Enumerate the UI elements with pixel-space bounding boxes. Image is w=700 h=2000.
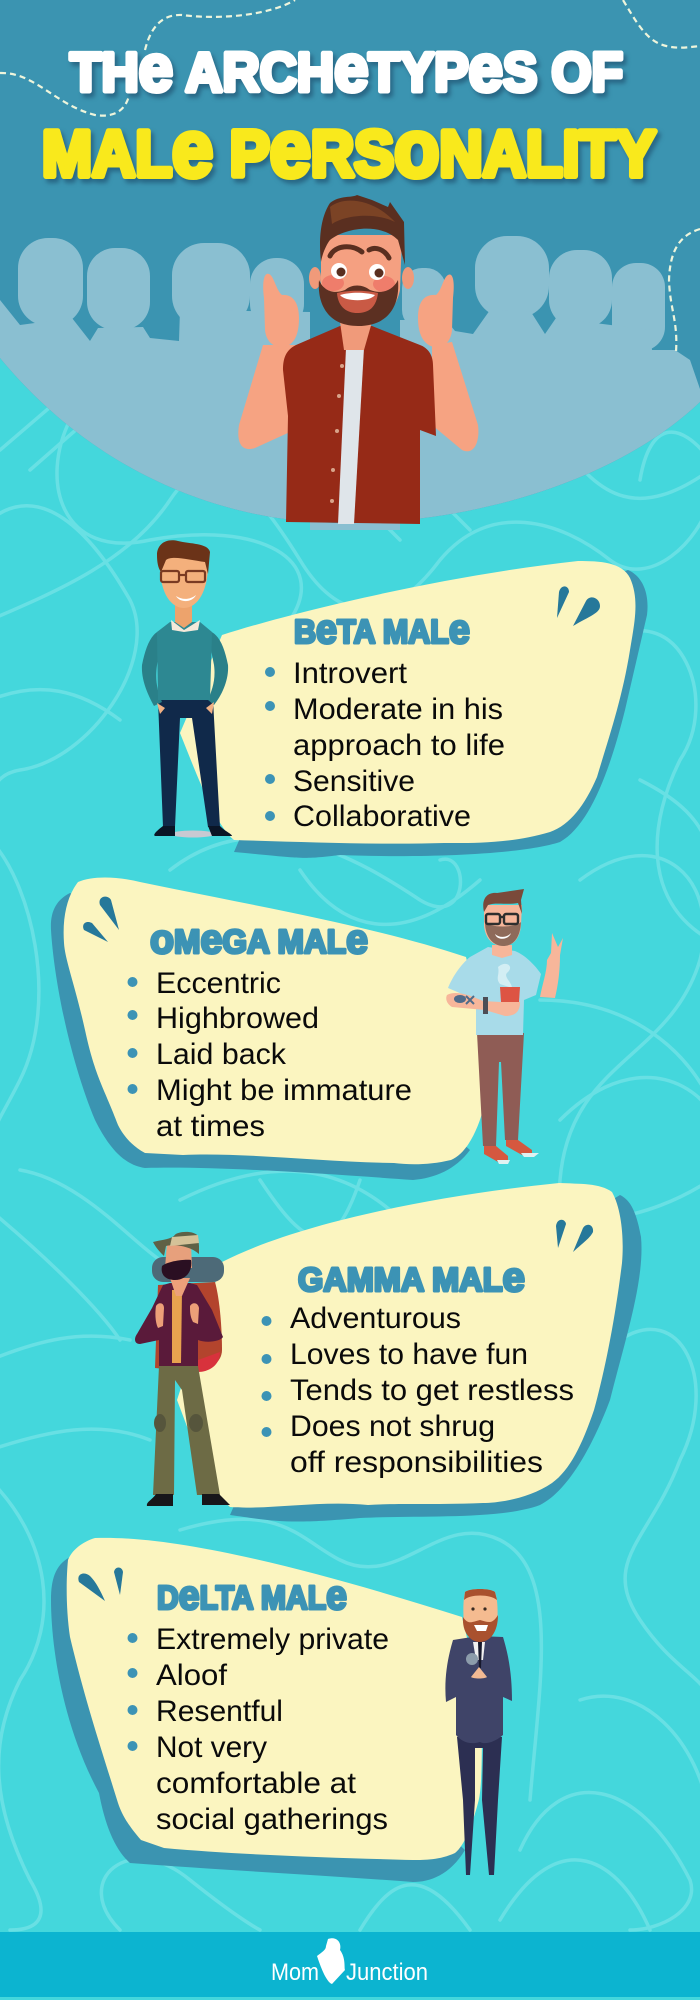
card <box>64 878 490 1164</box>
list: Tends to get restless <box>290 1374 574 1407</box>
logo: MomJunction <box>271 1938 428 1986</box>
list: Extremely private <box>156 1623 389 1656</box>
list: Laid back <box>156 1038 287 1071</box>
title line 1: THe ARCHeTYPeS OF <box>70 31 623 105</box>
crowd silhouette <box>0 236 700 530</box>
list: Not very <box>156 1731 267 1764</box>
heading: BeTA MALe <box>294 606 470 652</box>
list <box>262 1302 574 1479</box>
illustration: man in teal sweater <box>142 540 232 838</box>
list <box>128 1623 389 1836</box>
panel shadow <box>51 893 470 1180</box>
header banner with curved bottom <box>0 0 700 523</box>
decoration drops <box>557 586 600 626</box>
list <box>128 967 412 1143</box>
card <box>67 1538 482 1860</box>
panel: beta male <box>142 540 648 858</box>
panel shadow <box>230 1195 642 1522</box>
list: Moderate in his <box>293 693 503 726</box>
list: Sensitive <box>293 765 415 798</box>
heading: GAMMA MALe <box>298 1254 525 1300</box>
card <box>177 1183 623 1508</box>
heading: oMeGA MALe <box>150 916 368 962</box>
list: Adventurous <box>290 1302 461 1335</box>
panel shadow <box>51 1557 465 1882</box>
logo mark <box>317 1938 345 1984</box>
list: Eccentric <box>156 967 281 1000</box>
illustration: nervous man in suit <box>445 1589 512 1875</box>
decoration drops <box>83 897 119 942</box>
list: Introvert <box>293 657 408 690</box>
panel: delta male <box>51 1538 512 1882</box>
footer bar <box>0 1932 700 1997</box>
list <box>265 657 505 833</box>
illustration: hiker with backpack <box>135 1232 230 1506</box>
list: comfortable at <box>156 1767 357 1800</box>
logo: MomJunction: Mom <box>271 1959 319 1986</box>
heading: DeLTA MALe <box>157 1572 347 1618</box>
list: Aloof <box>156 1659 228 1692</box>
list: Does not shrug <box>290 1410 495 1443</box>
list: Resentful <box>156 1695 283 1728</box>
decoration drops <box>556 1220 593 1252</box>
list: off responsibilities <box>290 1446 543 1479</box>
illustration: smiling man with thumbs up <box>238 195 478 524</box>
panel shadow <box>234 570 648 858</box>
title line 2: MALe PeRSoNALITY <box>42 104 656 193</box>
list: Highbrowed <box>156 1002 319 1035</box>
logo: MomJunction: Junction <box>346 1959 428 1986</box>
list: social gatherings <box>156 1803 388 1836</box>
decoration drops <box>78 1568 123 1601</box>
list: Collaborative <box>293 800 471 833</box>
title <box>42 31 656 193</box>
panel: gamma male <box>135 1183 642 1522</box>
card <box>180 561 635 844</box>
illustration: man with coffee cup <box>446 889 563 1164</box>
list: at times <box>156 1110 265 1143</box>
decorative dashed lines <box>0 0 700 352</box>
list: Loves to have fun <box>290 1338 528 1371</box>
list: Might be immature <box>156 1074 412 1107</box>
list: approach to life <box>293 729 505 762</box>
panel: omega male <box>51 878 563 1180</box>
